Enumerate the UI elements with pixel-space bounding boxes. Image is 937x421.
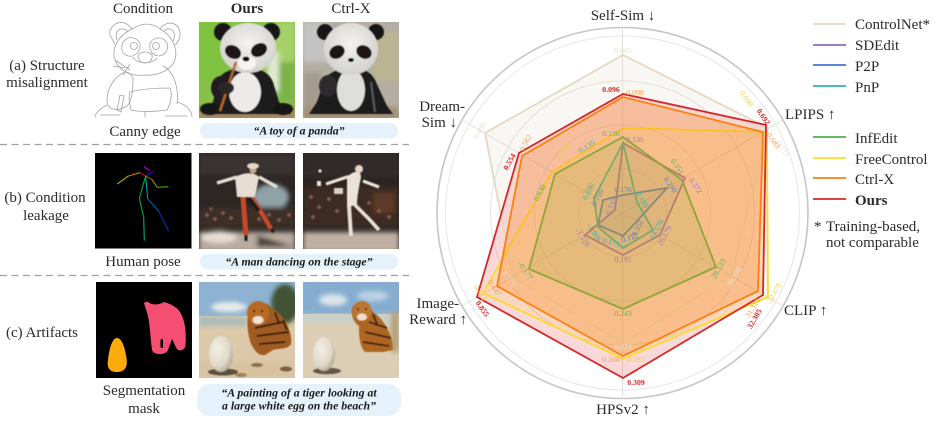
value labels: Self-Sim axis: 0.135 [577, 138, 597, 155]
legend item: Ours: Ours [855, 193, 888, 209]
value labels: Image-Reward axis: -0.177 [516, 260, 535, 282]
value labels: LPIPS axis: 0.351 [669, 157, 686, 177]
image: tiger and egg result from Ctrl-X [303, 282, 399, 378]
value labels: CLIP axis: 32.305 [745, 307, 764, 330]
value labels: Dream-Sim axis: 0.630 [531, 183, 548, 203]
value labels: Self-Sim axis [577, 46, 656, 194]
legend item: ControlNet [813, 17, 930, 33]
legend item: P2P [813, 59, 879, 75]
legend item: Ctrl-X: Ctrl-X [855, 172, 894, 188]
value labels: Image-Reward axis: -1.006 [585, 222, 604, 244]
prompt pill: a painting of a tiger looking at a large white egg on the beach [197, 384, 401, 416]
axis label: Dream-Sim [419, 99, 465, 131]
series: PnP [594, 143, 653, 248]
value labels: HPSv2 axis: 0.309 [627, 378, 645, 387]
prompt pill: a toy of a panda: “A toy of a panda” [253, 124, 345, 138]
axis label: Image-Reward: Reward ↑ [409, 312, 467, 328]
series: Ours [477, 94, 766, 378]
image: dancer result from Ctrl-X [303, 153, 399, 249]
footnote: training-based not comparable: Training-based, [826, 219, 920, 235]
axis label: Self-Sim: Self-Sim ↓ [591, 8, 655, 24]
image: canny edge condition of a panda [95, 22, 192, 117]
legend item: SDEdit: SDEdit [855, 38, 900, 54]
value labels: CLIP axis: 28.533 [709, 257, 728, 280]
value labels: HPSv2 axis: 0.243 [614, 309, 632, 318]
column heading: Ctrl-X: Ctrl-X [331, 1, 371, 17]
value labels: Self-Sim axis: 0.133 [638, 123, 656, 132]
value labels: Image-Reward axis: 0.855 [474, 299, 491, 319]
axis label: Image-Reward [409, 296, 467, 328]
label: Human pose: Human pose [105, 254, 181, 270]
legend item: Ctrl-X [813, 172, 894, 188]
value labels: CLIP axis: 26.179 [655, 224, 674, 247]
series: ControlNet [485, 55, 768, 343]
value labels: LPIPS axis: 0.180 [634, 190, 651, 210]
row label: (b) Condition leakage: (b) Condition [4, 190, 86, 206]
legend item: P2P: P2P [855, 59, 879, 75]
value labels: Dream-Sim axis: 0.696 [580, 182, 597, 202]
row label: (b) Condition leakage: leakage [23, 208, 69, 224]
value labels: LPIPS axis: 0.683 [765, 131, 782, 151]
value labels: CLIP axis: 31.312 [743, 296, 762, 319]
prompt pill: a man dancing on the stage [200, 254, 398, 270]
image: panda result from Ours [199, 22, 295, 118]
value labels: Dream-Sim axis: 0.554 [501, 152, 518, 172]
footnote: training-based not comparable: not comparable [826, 235, 919, 251]
prompt pill: a toy of a panda [200, 123, 398, 138]
row label: (a) Structure misalignment [6, 58, 89, 91]
image: panda result from Ctrl-X [303, 22, 399, 118]
value labels: Self-Sim axis: 0.098 [626, 88, 644, 97]
dashed divider [0, 144, 409, 146]
label: Canny edge: Canny edge [109, 124, 181, 140]
axis label: Image-Reward: Image- [417, 296, 459, 312]
prompt pill: a painting of a tiger looking at a large white egg on the beach: “A painting of a tiger looking at [221, 386, 377, 400]
value labels: LPIPS axis: 0.290 [662, 175, 679, 195]
image: dancer result from Ours [199, 153, 295, 249]
series: SDEdit [585, 143, 685, 255]
series fill: Ours [477, 94, 766, 378]
column heading: Ours: Ours [231, 1, 263, 17]
image: segmentation mask [96, 282, 192, 378]
legend item: FreeControl: FreeControl [855, 152, 928, 168]
prompt pill: a painting of a tiger looking at a large white egg on the beach: a large white egg on the beach” [222, 398, 376, 412]
value labels: LPIPS axis [634, 89, 792, 210]
legend item: InfEdit: InfEdit [855, 131, 898, 147]
series: InfEdit [529, 137, 716, 309]
label: Segmentation mask [103, 383, 186, 417]
value labels: HPSv2 axis [601, 231, 645, 387]
value labels: Dream-Sim axis: 0.562 [517, 133, 534, 153]
legend item: SDEdit [813, 38, 900, 54]
legend item: FreeControl [813, 152, 928, 168]
value labels: Self-Sim axis: 0.135 [626, 135, 644, 144]
value labels: Dream-Sim axis: 0.710 [589, 188, 606, 208]
value labels: Self-Sim axis: 0.176 [614, 185, 632, 194]
series: P2P [598, 188, 667, 236]
value labels: CLIP axis: 32.678 [765, 281, 784, 304]
radar chart [437, 28, 808, 398]
row label: (b) Condition leakage [4, 190, 86, 224]
value labels: HPSv2 axis: 0.287 [627, 355, 645, 364]
dashed divider [0, 274, 409, 276]
row label: (a) Structure misalignment: (a) Structure [9, 58, 85, 74]
legend item: PnP: PnP [855, 80, 879, 96]
legend item: InfEdit [813, 131, 898, 147]
column heading: Condition: Condition [113, 1, 173, 17]
legend item: PnP [813, 80, 879, 96]
value labels: HPSv2 axis: 0.274 [614, 342, 632, 351]
legend item: ControlNet: ControlNet* [855, 17, 930, 33]
radar grid circles and spokes [437, 28, 808, 398]
value labels: Self-Sim axis: 0.065 [614, 46, 632, 55]
row label: (c) Artifacts: (c) Artifacts [6, 325, 78, 341]
legend [813, 17, 930, 209]
value labels: Dream-Sim axis: 0.488 [471, 121, 488, 141]
value labels: CLIP axis: 24.579 [647, 218, 666, 241]
value labels: LPIPS axis: 0.690 [738, 89, 755, 109]
axis label: Dream-Sim: Dream- [419, 99, 465, 115]
value labels: Image-Reward axis: 0.812 [472, 283, 489, 303]
value labels: Image-Reward axis: 0.447 [486, 278, 503, 298]
value labels: Image-Reward axis [472, 222, 604, 319]
value labels: Image-Reward axis: -1.328 [573, 227, 592, 249]
value labels: HPSv2 axis: 0.172 [620, 231, 640, 244]
value labels: LPIPS axis: 0.692 [755, 107, 772, 127]
value labels: HPSv2 axis: 0.191 [614, 255, 632, 264]
legend item: Ours [813, 193, 888, 209]
footnote: training-based not comparable [814, 219, 920, 251]
label: Segmentation mask: Segmentation [103, 383, 186, 399]
value labels: Dream-Sim axis: 0.610 [555, 141, 572, 161]
series: FreeControl [483, 128, 768, 359]
label: Segmentation mask: mask [128, 401, 160, 417]
image: human pose skeleton [95, 153, 192, 248]
value labels: CLIP axis: 30.180 [725, 265, 744, 288]
image: tiger and egg result from Ours [199, 282, 295, 378]
value labels: Dream-Sim axis: 0.737 [603, 197, 620, 217]
footnote: training-based not comparable: * [814, 219, 822, 235]
axis label: Dream-Sim: Sim ↓ [422, 115, 457, 131]
value labels: LPIPS axis: 0.711 [775, 139, 792, 158]
series: Ctrl-X [497, 97, 763, 356]
row label: (a) Structure misalignment: misalignment [6, 75, 89, 91]
value labels: Self-Sim axis: 0.130 [602, 129, 620, 138]
value labels: Dream-Sim axis [471, 121, 620, 217]
axis label: HPSv2: HPSv2 ↑ [596, 402, 650, 418]
prompt pill: a man dancing on the stage: “A man dancing on the stage” [225, 254, 373, 268]
value labels: CLIP axis [627, 218, 784, 330]
axis label: LPIPS: LPIPS ↑ [785, 107, 835, 123]
value labels: HPSv2 axis: 0.288 [602, 355, 620, 364]
value labels: LPIPS axis: 0.372 [687, 176, 704, 196]
value labels: HPSv2 axis: 0.175 [601, 236, 621, 249]
value labels: Image-Reward axis: 0.125 [501, 269, 518, 289]
value labels: Self-Sim axis: 0.096 [602, 85, 620, 94]
value labels: CLIP axis: 24.351 [627, 218, 646, 241]
axis label: CLIP: CLIP ↑ [784, 303, 827, 319]
